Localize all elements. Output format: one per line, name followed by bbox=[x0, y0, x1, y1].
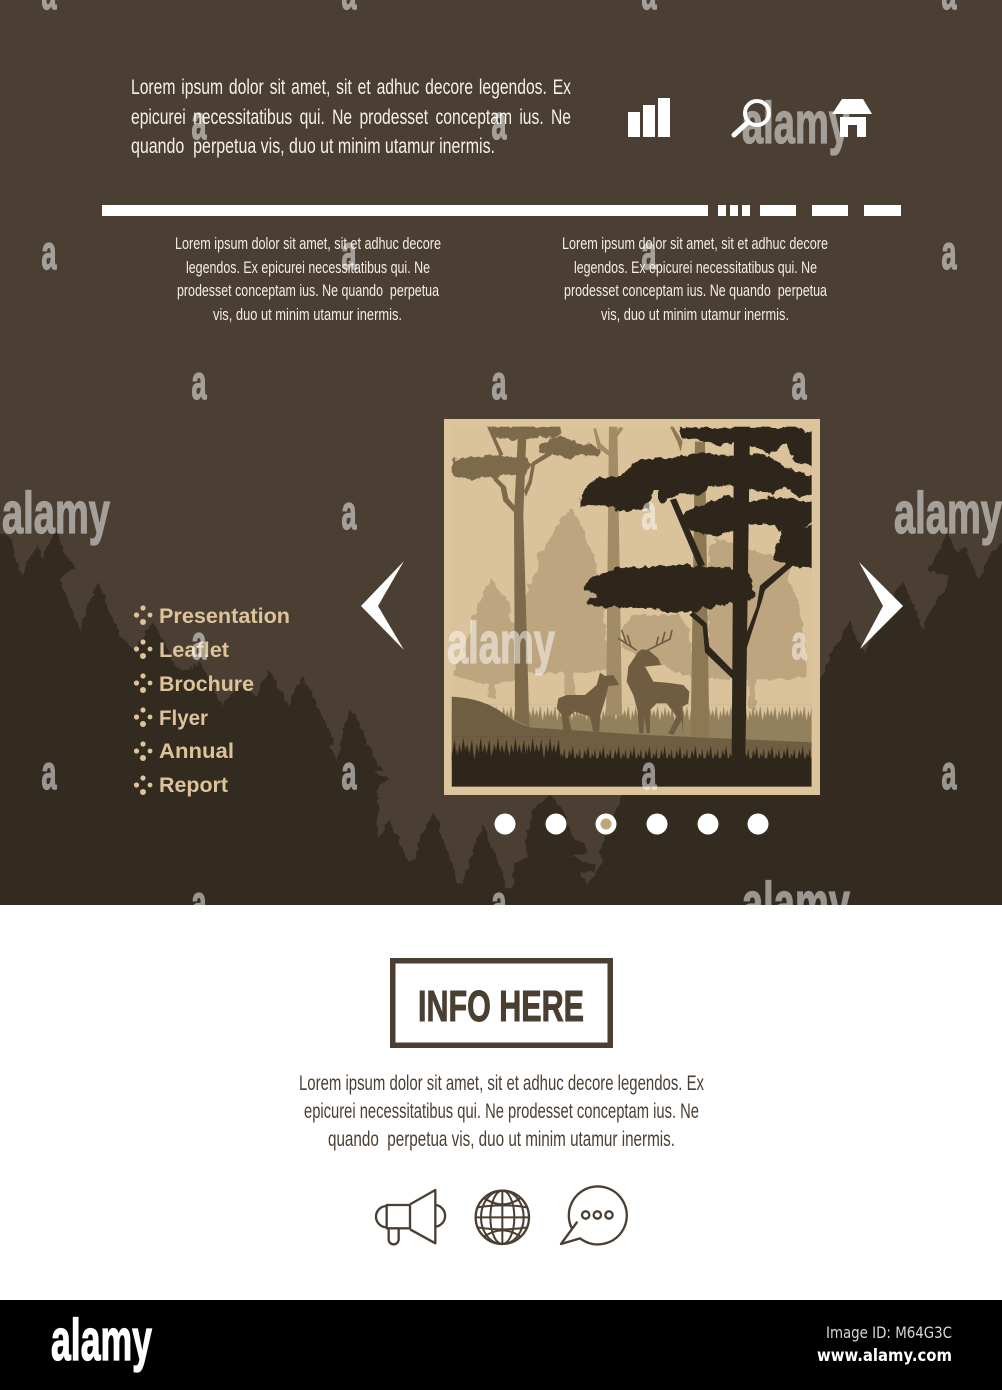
large watermark logos: alamy bbox=[2, 481, 110, 546]
menu labels: Presentation bbox=[159, 605, 290, 628]
left column paragraph bbox=[175, 234, 441, 324]
black footer bar bbox=[0, 1300, 1002, 1390]
menu labels: Leaflet bbox=[159, 639, 229, 662]
icon: megaphone bbox=[376, 1190, 445, 1244]
repeated watermark letters: a bbox=[42, 747, 57, 800]
carousel pagination dots bbox=[494, 814, 768, 834]
repeated watermark letters bbox=[42, 0, 957, 930]
repeated watermark letters: a bbox=[492, 357, 507, 410]
menu labels: Brochure bbox=[159, 673, 254, 696]
footer logo: alamy bbox=[51, 1308, 152, 1373]
large watermark logos: alamy bbox=[742, 871, 850, 936]
bulleted menu list bbox=[134, 605, 290, 797]
icon: house bbox=[832, 99, 872, 137]
sky bbox=[452, 427, 812, 787]
repeated watermark letters: a bbox=[792, 357, 807, 410]
white lower panel bbox=[0, 905, 1002, 1300]
right column paragraph: prodesset conceptam ius. Ne quando perpetua bbox=[564, 281, 827, 300]
top paragraph: epicurei necessitatibus qui. Ne prodesset conceptam ius. Ne bbox=[131, 106, 571, 129]
repeated watermark letters: a bbox=[342, 747, 357, 800]
dark header and forest background panel bbox=[0, 0, 1002, 906]
repeated watermark letters: a bbox=[942, 227, 957, 280]
picture frame bbox=[444, 419, 820, 795]
icon: speech bubble bbox=[561, 1186, 627, 1244]
mid grass band bbox=[452, 704, 812, 721]
footer image id and url: www.alamy.com bbox=[817, 1346, 952, 1366]
left tree bbox=[452, 426, 600, 727]
icon: globe bbox=[476, 1191, 529, 1244]
right column paragraph: Lorem ipsum dolor sit amet, sit et adhuc decore bbox=[562, 234, 828, 253]
bottom centre forest silhouette bbox=[370, 790, 1002, 915]
repeated watermark letters: a bbox=[642, 487, 657, 540]
lower paragraph: epicurei necessitatibus qui. Ne prodesset conceptam ius. Ne bbox=[304, 1100, 699, 1123]
repeated watermark letters: a bbox=[192, 617, 207, 670]
info here button: INFO HERE bbox=[418, 982, 584, 1031]
repeated watermark letters: a bbox=[642, 227, 657, 280]
ground hill bbox=[452, 697, 812, 762]
info here button bbox=[393, 961, 610, 1045]
icon: magnifier bbox=[734, 101, 769, 135]
menu labels bbox=[159, 605, 290, 797]
repeated watermark letters: a bbox=[342, 487, 357, 540]
left forest silhouette bbox=[0, 530, 440, 917]
top paragraph: quando perpetua vis, duo ut minim utamur inermis. bbox=[131, 135, 495, 158]
arrow: previous bbox=[361, 561, 404, 650]
framed forest picture with deer bbox=[444, 419, 820, 795]
repeated watermark letters: a bbox=[192, 357, 207, 410]
footer image id and url bbox=[817, 1323, 952, 1366]
repeated watermark letters: a bbox=[942, 747, 957, 800]
top paragraph bbox=[131, 76, 571, 158]
repeated watermark letters: a bbox=[42, 227, 57, 280]
left column paragraph: prodesset conceptam ius. Ne quando perpetua bbox=[177, 281, 439, 300]
foreground tree bbox=[580, 427, 815, 760]
repeated watermark letters: a bbox=[642, 747, 657, 800]
footer image id and url: Image ID: M64G3C bbox=[826, 1323, 952, 1342]
right column paragraph: vis, duo ut minim utamur inermis. bbox=[601, 305, 789, 324]
repeated watermark letters: a bbox=[192, 877, 207, 930]
large watermark logos: alamy bbox=[742, 91, 850, 156]
large watermark logos: alamy bbox=[447, 611, 555, 676]
menu labels: Report bbox=[159, 774, 228, 797]
deer: stag bbox=[618, 630, 689, 735]
left column paragraph: legendos. Ex epicurei necessitatibus qui. Ne bbox=[186, 258, 430, 277]
lower paragraph: Lorem ipsum dolor sit amet, sit et adhuc decore legendos. Ex bbox=[299, 1072, 704, 1095]
repeated watermark letters: a bbox=[192, 97, 207, 150]
deer: doe bbox=[557, 673, 619, 732]
right column paragraph: legendos. Ex epicurei necessitatibus qui. Ne bbox=[574, 258, 817, 277]
left column paragraph: vis, duo ut minim utamur inermis. bbox=[213, 305, 402, 324]
menu labels: Annual bbox=[159, 740, 234, 763]
repeated watermark letters: a bbox=[492, 97, 507, 150]
mid-distance trunks bbox=[593, 427, 623, 715]
bullet icons bbox=[134, 605, 152, 795]
repeated watermark letters: a bbox=[492, 877, 507, 930]
lower paragraph bbox=[299, 1072, 704, 1151]
repeated watermark letters: a bbox=[342, 227, 357, 280]
large watermark logos bbox=[2, 91, 1002, 936]
right column paragraph bbox=[562, 234, 828, 324]
repeated watermark letters: a bbox=[792, 617, 807, 670]
top paragraph: Lorem ipsum dolor sit amet, sit et adhuc decore legendos. Ex bbox=[131, 76, 571, 99]
foreground grass bbox=[452, 737, 562, 760]
distant pine trees bbox=[454, 508, 807, 710]
segmented divider bar bbox=[102, 205, 901, 216]
lower paragraph: quando perpetua vis, duo ut minim utamur inermis. bbox=[328, 1128, 675, 1151]
right forest silhouette bbox=[800, 533, 1002, 820]
icon: bar chart bbox=[628, 98, 670, 137]
menu labels: Flyer bbox=[159, 707, 208, 730]
left column paragraph: Lorem ipsum dolor sit amet, sit et adhuc decore bbox=[175, 234, 441, 253]
arrow: next bbox=[859, 562, 903, 649]
